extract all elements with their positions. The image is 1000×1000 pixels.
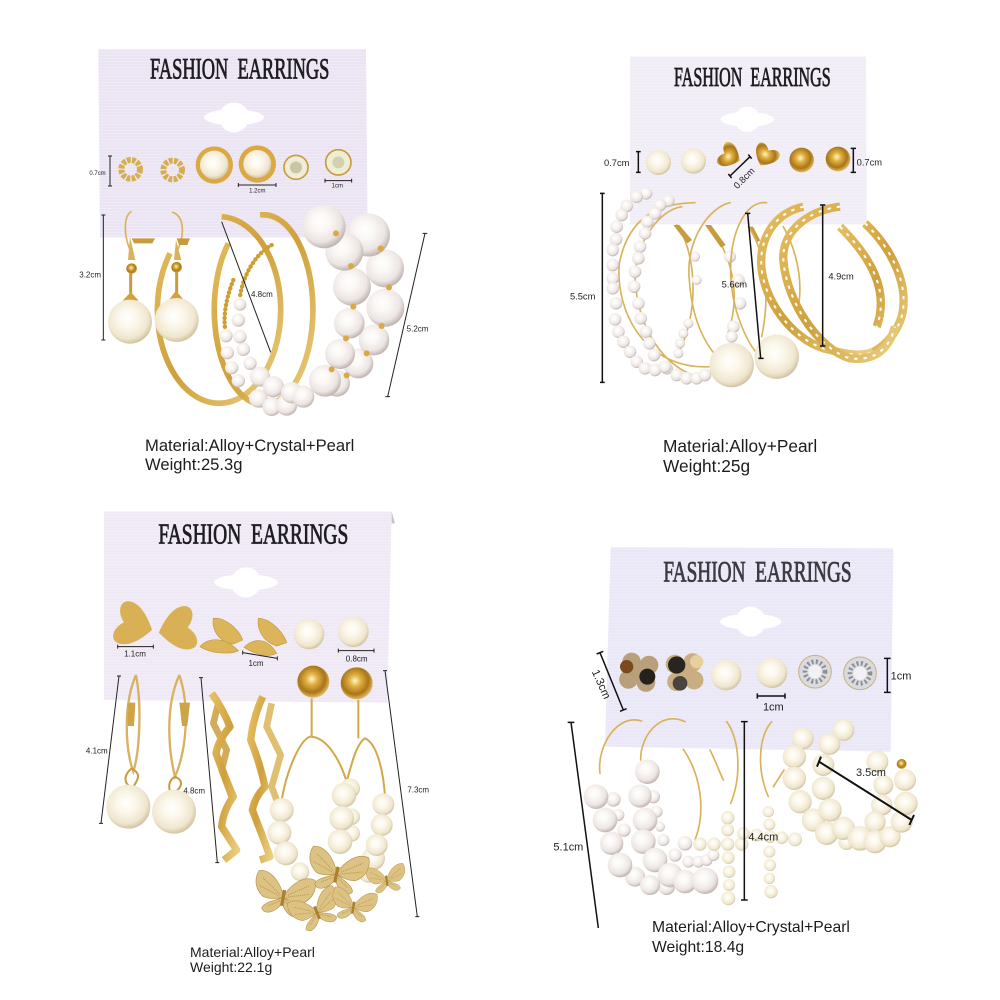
label: 4.8cm dimension: 4.8cm (183, 787, 205, 796)
heading: fashion earrings: FASHION EARRINGS (150, 54, 329, 86)
icon: gold butterfly charms (251, 845, 408, 935)
icon: pearl studs (294, 616, 369, 649)
icon: pearl studs (711, 657, 787, 690)
text: material and weight, set one: Weight:25.3g (145, 455, 242, 474)
label: right 0.7cm dimension: 0.7cm (857, 158, 882, 168)
icon: pearl cluster hoop earrings (584, 719, 719, 895)
heading: fashion earrings: FASHION EARRINGS (158, 518, 348, 550)
label: 0.8cm dimension: 0.8cm (732, 166, 757, 191)
icon: pearl studs with gold rim (196, 145, 276, 184)
label: 5.1cm dimension: 5.1cm (553, 842, 583, 854)
label: 3.2cm dimension (79, 215, 105, 340)
text: material and weight, set two (663, 436, 817, 476)
label: 3.5cm dimension: 3.5cm (856, 767, 886, 779)
icon: pearls on teardrop hoops (267, 778, 394, 883)
label: 1cm height dimension (884, 658, 911, 692)
panel: earring set three (86, 512, 429, 935)
label: 1.3cm dimension: 1.3cm (589, 668, 612, 701)
icon: crystal studs (799, 655, 876, 690)
icon: gold ball studs (789, 147, 850, 172)
label: 1cm dimension (243, 651, 277, 668)
label: 5.6cm dimension (722, 213, 764, 358)
label: 4.8cm dimension (183, 678, 219, 863)
label: 1.1cm dimension (118, 645, 153, 659)
label: 1cm width dimension: 1cm (763, 701, 784, 713)
label: 1cm dimension: 1cm (332, 183, 343, 189)
icon: pearl cross hoop earrings (693, 722, 802, 905)
label: 4.8cm dimension: 4.8cm (251, 290, 273, 299)
card: lavender backing card (104, 512, 395, 703)
icon: hanging hole (720, 607, 781, 637)
label: 4.8cm dimension (222, 222, 273, 352)
label: 5.6cm dimension: 5.6cm (722, 279, 747, 289)
label: 4.1cm dimension: 4.1cm (86, 746, 108, 755)
label: 4.1cm dimension (86, 676, 121, 823)
icon: flat gold hoop earrings (157, 215, 313, 405)
icon: cream pearl c-hoop earrings (783, 719, 918, 853)
icon: hanging hole (214, 567, 278, 597)
icon: large pearl hoop earrings (249, 205, 404, 416)
label: 4.4cm dimension: 4.4cm (748, 832, 778, 844)
heading: fashion earrings: FASHION EARRINGS (674, 62, 831, 92)
icon: wavy gold hoop earrings (212, 693, 281, 860)
label: 1cm height dimension: 1cm (891, 670, 911, 682)
label: 5.2cm dimension (385, 233, 429, 397)
label: 0.8cm dimension (338, 649, 374, 664)
label: 7.3cm dimension (383, 671, 429, 917)
card: blue-lavender backing card (605, 547, 893, 752)
icon: small pearl and bead hoop (219, 245, 272, 387)
label: 1cm dimension: 1cm (248, 659, 264, 668)
label: 3.5cm dimension (817, 757, 914, 825)
text: material and weight, set four (652, 919, 850, 956)
heading: fashion earrings: FASHION EARRINGS (663, 557, 852, 589)
icon: pearl drop earrings (108, 212, 199, 344)
icon: hanging hole (721, 107, 774, 132)
icon: gold chain hoop earrings (761, 207, 904, 359)
icon: gold flower studs (121, 160, 182, 179)
text: material and weight, set one: Material:Alloy+Crystal+Pearl (145, 436, 354, 455)
icon: gold heart studs (716, 140, 782, 172)
label: left 0.7cm dimension: 0.7cm (604, 158, 630, 168)
label: 4.9cm dimension: 4.9cm (828, 271, 854, 281)
label: 0.8cm dimension: 0.8cm (346, 655, 368, 664)
label: 0.7cm dimension: 0.7cm (89, 171, 106, 177)
label: 1.3cm dimension (589, 651, 627, 711)
label: 7.3cm dimension: 7.3cm (407, 785, 429, 794)
text: material and weight, set two: Material:Alloy+Pearl (663, 436, 817, 456)
label: 1.2cm dimension: 1.2cm (249, 188, 265, 194)
icon: crystal studs (284, 150, 351, 179)
label: 1cm width dimension (757, 693, 785, 713)
text: material and weight, set three: Material:Alloy+Pearl (190, 944, 315, 960)
panel: earring set four (553, 547, 918, 928)
card: lavender backing card (98, 49, 368, 237)
icon: pearl hoop earrings (606, 187, 760, 385)
label: 0.8cm dimension (728, 155, 757, 191)
label: 5.2cm dimension: 5.2cm (407, 325, 429, 334)
icon: hanging hole (204, 102, 264, 132)
label: left 0.7cm dimension (604, 152, 641, 172)
label: 3.2cm dimension: 3.2cm (79, 270, 101, 279)
text: material and weight, set four: Weight:18.4g (652, 939, 744, 956)
label: right 0.7cm dimension (851, 148, 882, 172)
text: material and weight, set one (145, 436, 354, 474)
icon: gold ball studs with teardrop hoops (282, 666, 385, 800)
label: 1.1cm dimension: 1.1cm (124, 650, 146, 659)
label: 5.1cm dimension (553, 722, 598, 928)
label: 0.7cm dimension (89, 156, 112, 186)
card: pale backing card (630, 57, 867, 224)
label: 1.2cm dimension (238, 183, 276, 194)
panel: earring set two (570, 57, 904, 387)
label: 4.4cm dimension (741, 722, 778, 900)
label: 4.9cm dimension (820, 205, 854, 346)
icon: gold butterfly studs (200, 618, 287, 655)
label: 5.5cm dimension (570, 193, 605, 382)
panel: earring set one (79, 49, 429, 416)
icon: pearl studs (646, 148, 706, 175)
text: material and weight, set four: Material:Alloy+Crystal+Pearl (652, 919, 850, 936)
icon: tortoiseshell flower studs (618, 651, 704, 693)
icon: thin hoops with faceted pearl drops (106, 675, 196, 834)
icon: textured gold heart studs (111, 599, 198, 654)
label: 1cm dimension (325, 179, 352, 189)
text: material and weight, set three (190, 944, 315, 975)
text: material and weight, set two: Weight:25g (663, 456, 750, 476)
label: 5.5cm dimension: 5.5cm (570, 291, 596, 301)
text: material and weight, set three: Weight:22.1g (190, 959, 272, 975)
icon: thin hoops with big pearl (689, 203, 800, 387)
